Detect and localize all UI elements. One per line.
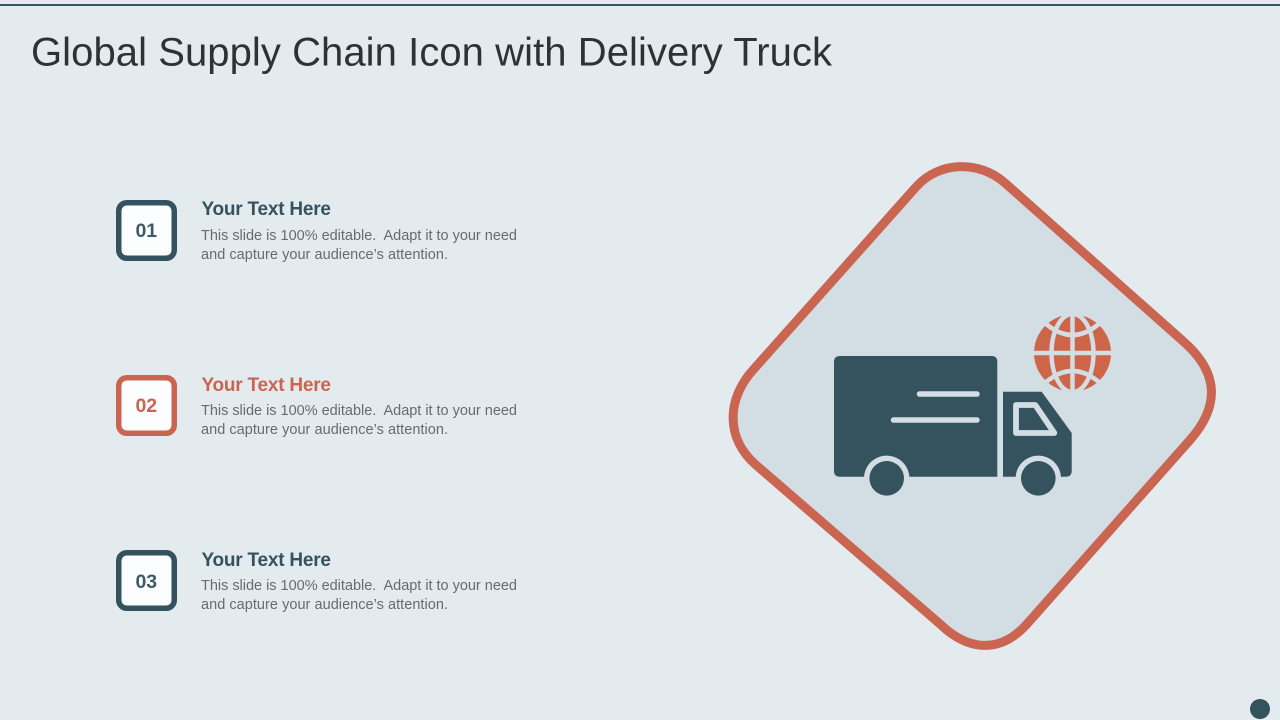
item 02 [119,375,517,438]
description 03: This slide is 100% editable. Adapt it to your need [201,578,517,594]
description 02: This slide is 100% editable. Adapt it to your need [201,403,517,419]
number badge 01 [119,203,174,258]
number badge 02: 02 [135,395,157,417]
top rule [0,4,1280,6]
number badge 03: 03 [135,571,157,593]
heading 02: Your Text Here [202,375,331,396]
item 03 [119,550,517,613]
description 01: This slide is 100% editable. Adapt it to your need [201,228,517,244]
cargo speed lines [894,394,977,420]
icon: globe [1033,314,1112,392]
front wheel [1012,456,1066,503]
truck cab [1003,392,1072,477]
item 01 [119,199,517,263]
rear wheel [860,456,914,503]
number badge 03 [119,553,174,608]
number badge 01: 01 [135,220,157,242]
description 02: and capture your audience’s attention. [201,422,448,438]
heading 01: Your Text Here [202,199,331,220]
title: Global Supply Chain Icon with Delivery Truck [31,30,833,74]
number badge 02 [119,378,174,433]
corner dot [1250,699,1270,719]
rounded diamond panel [733,167,1211,645]
truck cargo box [834,356,997,477]
icon: delivery truck [834,356,1072,503]
description 03: and capture your audience’s attention. [201,597,448,613]
heading 03: Your Text Here [202,550,331,571]
description 01: and capture your audience’s attention. [201,247,448,263]
truck window [1016,405,1054,433]
